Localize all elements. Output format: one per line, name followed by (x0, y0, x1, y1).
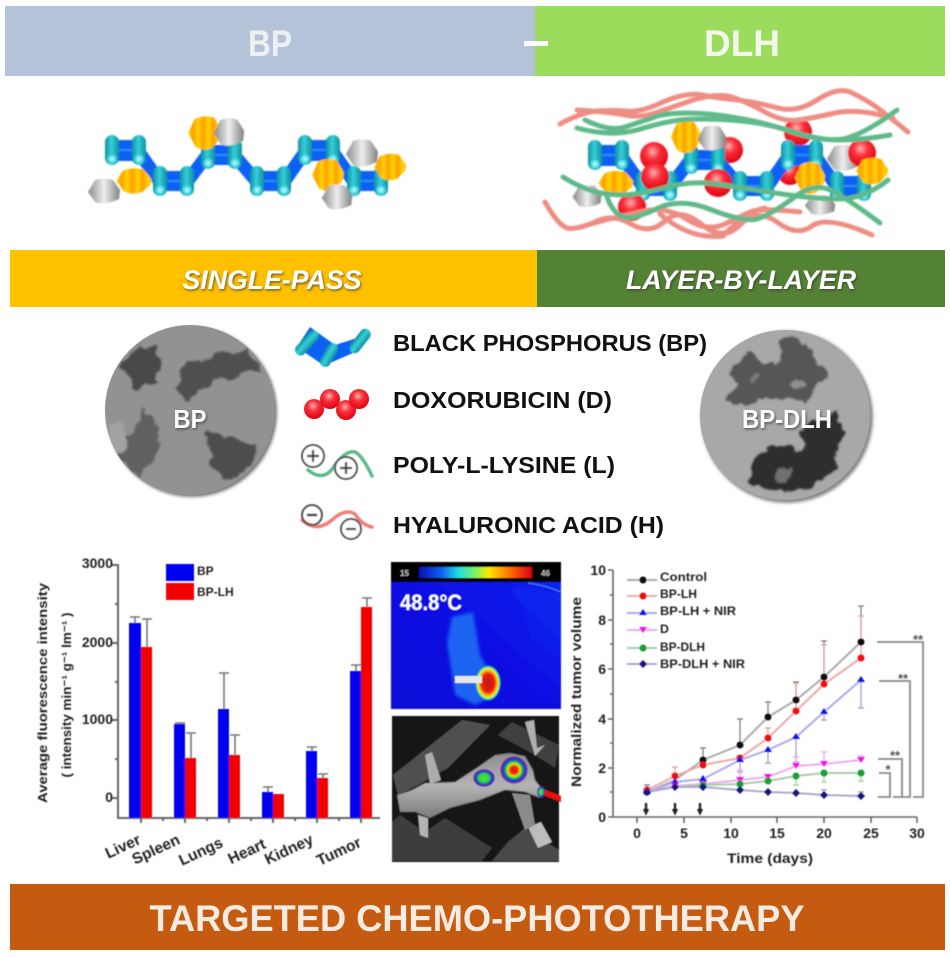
axes and y ticks (82, 555, 380, 823)
series: BP-LH + NIR (643, 676, 865, 794)
significance brackets (877, 632, 924, 797)
organ labels (103, 831, 364, 870)
series: BP-DLH (647, 770, 864, 792)
chart legend: BP-DLH (660, 640, 705, 654)
icon: black phosphorus (293, 327, 373, 369)
heading: DLH (535, 6, 945, 76)
diagram: BP sheet with photothermal and targeting molecules (88, 116, 406, 209)
method banner (10, 250, 945, 307)
colour scale: 15 (400, 569, 409, 578)
colour scale: 46 (541, 569, 550, 578)
axes and ticks: 8 (598, 612, 606, 628)
chart legend: BP-DLH + NIR (660, 657, 745, 671)
y axis title: ( intensity min⁻¹ g⁻¹ lm⁻¹ ) (59, 612, 74, 778)
error bars (644, 606, 864, 796)
label: layer-by-layer (537, 250, 945, 307)
axes and ticks: 2 (598, 760, 606, 776)
micrograph: BP-DLH (700, 330, 873, 503)
thermal image (391, 562, 561, 709)
mouse silhouette (447, 612, 495, 705)
label: single-pass: SINGLE-PASS (182, 265, 362, 295)
axes and ticks: 6 (598, 661, 606, 677)
top banner (5, 6, 945, 76)
micrograph: BP: BP (174, 404, 206, 434)
significance brackets: * (885, 762, 891, 777)
y axis title: Average fluorescence intensity (35, 582, 50, 803)
icon: hyaluronic acid (302, 505, 372, 539)
chart legend: D (660, 622, 669, 636)
dash between BP and DLH (524, 41, 548, 46)
series: BP-LH (644, 654, 864, 794)
axes and ticks: 0 (633, 825, 641, 841)
temperature label: 48.8°C (400, 590, 462, 615)
chart legend: BP-LH + NIR (660, 604, 736, 618)
BP-LH bars (141, 607, 372, 818)
series: Control (644, 638, 864, 796)
label: poly-l-lysine: POLY-L-LYSINE (L) (393, 452, 615, 478)
axes and ticks (590, 562, 925, 841)
axes and ticks: 15 (769, 825, 785, 841)
axes and ticks: 20 (816, 825, 832, 841)
significance brackets: ** (913, 632, 924, 647)
fluorescent signals (473, 756, 561, 802)
chart legend (166, 564, 234, 600)
bottom banner: TARGETED CHEMO-PHOTOTHERAPY (150, 898, 805, 939)
chart legend: BP-LH (660, 587, 697, 601)
axes and ticks: 30 (909, 825, 925, 841)
label: layer-by-layer: LAYER-BY-LAYER (626, 265, 856, 295)
heading: BP: BP (248, 23, 292, 64)
series: BP-DLH + NIR (643, 783, 865, 800)
organ labels: Kidney (262, 831, 316, 869)
axes and ticks: 10 (723, 825, 739, 841)
series: D (643, 757, 865, 795)
chart legend (627, 570, 745, 671)
hot spot (475, 665, 501, 701)
axes and ticks: 0 (598, 809, 606, 825)
organ labels: Lungs (176, 834, 226, 869)
chart legend: BP-LH (197, 585, 234, 599)
axes and y ticks: 3000 (82, 555, 113, 571)
BP bars (129, 623, 361, 818)
label: hyaluronic acid: HYALURONIC ACID (H) (393, 512, 664, 538)
label: single-pass (10, 250, 537, 307)
y axis title (35, 582, 74, 803)
axes and ticks: 25 (863, 825, 879, 841)
axes and y ticks: 2000 (82, 634, 113, 650)
heading: BP (5, 6, 535, 76)
colour scale (400, 567, 550, 578)
fluorescence image of mouse (392, 716, 561, 862)
organ labels: Spleen (129, 831, 183, 868)
significance brackets: ** (898, 671, 909, 686)
organ labels: Heart (226, 836, 269, 868)
mouse body (397, 753, 543, 818)
axes and ticks: 5 (680, 825, 688, 841)
label: black phosphorus: BLACK PHOSPHORUS (BP) (393, 330, 707, 356)
injection arrows (644, 803, 702, 813)
icon: poly-l-lysine (302, 445, 372, 479)
axes and ticks: 10 (590, 562, 606, 578)
line chart: tumor volume (568, 562, 925, 866)
axes and y ticks: 0 (105, 789, 113, 805)
organ labels: Tumor (314, 834, 364, 870)
x axis title: Time (days) (727, 850, 813, 866)
chart legend: Control (660, 570, 707, 584)
label: doxorubicin: DOXORUBICIN (D) (393, 387, 612, 413)
micrograph: BP-DLH: BP-DLH (742, 404, 832, 434)
axes and ticks: 4 (598, 711, 606, 727)
diagram: BP-DLH layered nanosheet (545, 91, 908, 237)
micrograph: BP (105, 325, 277, 497)
chart legend: BP (197, 564, 214, 578)
bottom banner (10, 884, 945, 950)
axes and y ticks: 1000 (82, 711, 113, 727)
icon: doxorubicin (304, 389, 369, 420)
bar chart: organ fluorescence (35, 555, 380, 870)
significance brackets: ** (890, 748, 901, 763)
organ labels: Liver (103, 831, 143, 862)
error bars (130, 598, 372, 792)
legend of components (293, 327, 707, 539)
heading: DLH: DLH (704, 23, 780, 64)
y axis title: Normalized tumor volume (568, 597, 584, 787)
